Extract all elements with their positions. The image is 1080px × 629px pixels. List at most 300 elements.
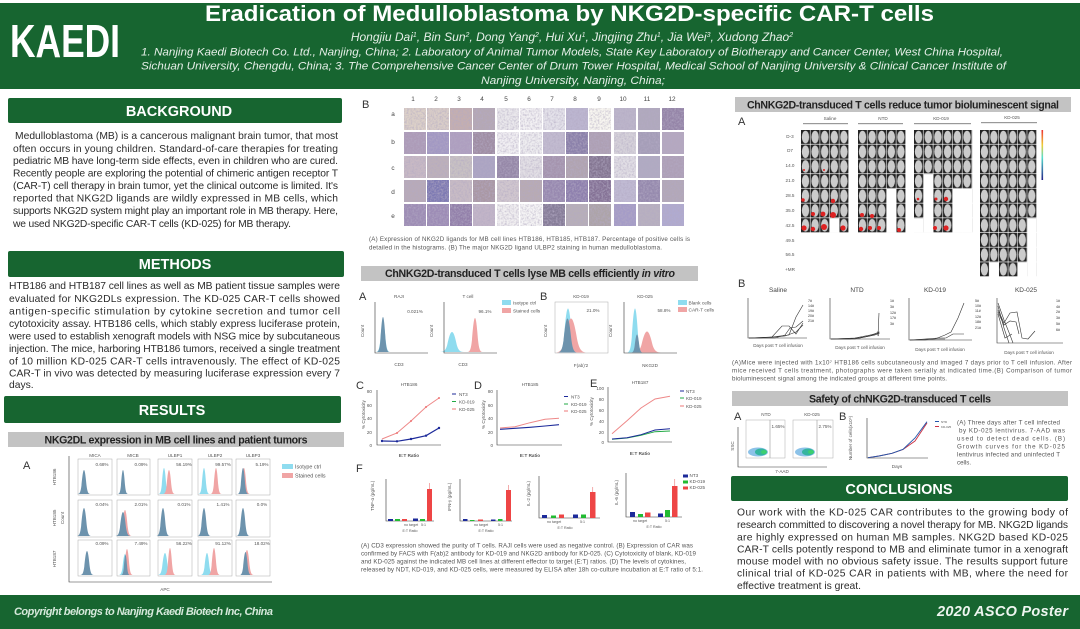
chart: RAJI: Count — [360, 324, 365, 337]
chart: KD-019: 10# — [975, 304, 981, 308]
heading: methods — [8, 251, 344, 277]
safety caption: cells. — [957, 460, 971, 466]
center figure caption — [361, 542, 703, 574]
chart: NKG2DL flow histograms: MICA — [89, 453, 102, 458]
row letters: d — [391, 189, 395, 196]
panel: D cytotoxicity HTB185 — [474, 380, 587, 458]
chart: RAJI: 0.021% — [407, 309, 423, 314]
background text: supports NKG2D system might play an important role in MB therapy. Here, — [13, 206, 338, 217]
chart: KD-019: 21# — [975, 326, 981, 330]
tissue caption: detailed in the histograms. (B) The major NKG2D ligand ULBP2 staining in human medulloblastoma. — [369, 244, 662, 252]
legend: NKG2DL — [282, 464, 326, 480]
chart: RAJI: RAJI — [394, 294, 404, 299]
chart: NKG2DL flow histograms: 0.09% — [95, 541, 109, 546]
chart: RAJI: CD3 — [394, 362, 404, 367]
bar chart: IFN: E:T Ratio — [479, 529, 493, 533]
header banner — [0, 1, 1080, 89]
bar chart: IL-6: no target — [547, 520, 561, 524]
chart: NTD: 3# — [890, 322, 894, 326]
panel: D cytotoxicity HTB185: 60 — [488, 403, 493, 408]
row letters — [391, 111, 395, 220]
methods text: cytotoxicity assay. HTB186 cells, which stably express luciferase protein, — [9, 319, 340, 330]
heading: conclusions — [731, 476, 1068, 501]
authors: Hongjiu Dai — [351, 30, 413, 44]
row labels: 56.5 — [786, 252, 795, 257]
panel: B CAR expression: B — [540, 291, 547, 303]
authors: , Dong Yang — [469, 30, 535, 44]
conclusions text: mouse model with no obvious safety issue. The results support future — [737, 556, 1068, 568]
panel: A mouse imaging: A — [738, 116, 746, 128]
center figure caption: confirmed by FACS with F(ab)2 antibody for KD-019 and NKG2D antibody for KD-025. (C) Cytotoxicity of blank, KD-019 — [361, 550, 697, 558]
background text: Medulloblastoma (MB) is a cancerous malignant brain tumor, that most — [15, 131, 338, 142]
chart: 7-AAD scatter: SSC — [730, 441, 735, 451]
panel: E cytotoxicity HTB187: 0 — [601, 440, 604, 445]
chart: NKG2DL flow histograms: 0.0% — [257, 502, 267, 507]
panel: D cytotoxicity HTB185: % Cytotoxicity — [481, 399, 486, 429]
column numbers: 9 — [597, 96, 601, 103]
panel: B growth curves: B — [839, 411, 846, 423]
panel: A mouse imaging — [738, 115, 1043, 277]
chart: 7-AAD scatter: NTD — [761, 412, 771, 417]
panel: B tumor signal curves — [738, 278, 1063, 355]
authors: 2 — [788, 32, 793, 39]
panel: E cytotoxicity HTB187: 80 — [599, 397, 604, 402]
chart: KD-019: 21.0% — [586, 308, 600, 313]
chart: KD-025: 58.8% — [657, 308, 671, 313]
chart: NKG2DL flow histograms: 18.02% — [254, 541, 270, 546]
authors: 1 — [657, 32, 661, 39]
row letters: b — [391, 139, 395, 146]
chart: NKG2DL flow histograms: ULBP2 — [208, 453, 223, 458]
panel: D cytotoxicity HTB185: 20 — [488, 430, 493, 435]
panel: D cytotoxicity HTB185: 80 — [488, 389, 493, 394]
chart: KD-019 — [909, 287, 981, 352]
heading: ChNKG2D lyse — [361, 266, 698, 281]
chart: Saline: 21# — [808, 319, 814, 323]
heading: results: RESULTS — [139, 403, 206, 419]
panel: C cytotoxicity HTB186: HTB186 — [401, 382, 418, 387]
chart: KD-025: NKG2D — [642, 363, 659, 368]
legend: CAR — [678, 300, 715, 314]
row labels: 14.0 — [786, 163, 795, 168]
bar chart: IFN: 5:1 — [498, 523, 503, 527]
chart: NTD — [830, 287, 896, 350]
chart: KD-025: Count — [608, 324, 613, 337]
chart: NKG2DL flow histograms: 91.12% — [215, 541, 231, 546]
panel: D cytotoxicity HTB185: HTB185 — [522, 382, 539, 387]
panel: E cytotoxicity HTB187: NT3 — [686, 389, 695, 394]
title: Eradication of Medulloblastoma by NKG2D-specific CAR-T cells — [205, 1, 934, 26]
panel: C cytotoxicity HTB186: 0 — [369, 443, 372, 448]
chart: NKG2DL flow histograms: HTB186 — [52, 468, 57, 485]
chart: KD-025: KD-025 — [637, 294, 653, 299]
chart: RAJI — [360, 294, 428, 367]
heading: safety: Safety of chNKG2D-transduced T cells — [809, 394, 991, 406]
panel: F cytokine bars — [356, 463, 706, 533]
column numbers: 3 — [457, 96, 461, 103]
background text: (CAR-T) cell therapy in brain tumor, yet the clinical outcome is limited. It's — [13, 181, 338, 192]
chart: NKG2DL flow histograms: HTB187 — [52, 550, 57, 567]
chart: T cell: CD3 — [458, 362, 468, 367]
safety caption: used to detect dead cells. (B) — [957, 436, 1065, 442]
bar chart: IL-2: no target — [633, 519, 647, 523]
bar chart: IFN: no target — [474, 523, 488, 527]
chart: growth: Number of cells(x10⁶) — [848, 415, 853, 460]
tissue grid — [404, 108, 684, 226]
panel: E cytotoxicity HTB187: 100 — [596, 386, 604, 391]
chart: NKG2DL flow histograms: ULBP1 — [168, 453, 183, 458]
safety caption: Growth curves for the KD-025 — [957, 444, 1066, 450]
bar chart: TNF — [370, 479, 434, 533]
bar chart: IL-6: 5:1 — [580, 520, 585, 524]
methods text: evaluated for NKG2DLs expression. The KD-025 CAR-T cells showed — [9, 294, 340, 305]
column numbers: 2 — [434, 96, 438, 103]
panel: B tumor signal curves: B — [738, 278, 745, 290]
chart: KD-019: 18# — [975, 320, 981, 324]
column numbers: 12 — [668, 96, 676, 103]
safety caption: (A) Three days after T cell infected — [957, 420, 1061, 426]
row labels: D-3 — [786, 134, 794, 139]
panel: C cytotoxicity HTB186: 40 — [367, 416, 372, 421]
tumor signal caption: mice received T cells treatment, photographs were taken serially at indicated time.(B) Comparison of tumor — [732, 368, 1072, 374]
background text: reported that NKG2D ligands are wildly expressed in MB cells, which — [13, 194, 338, 204]
chart: KD-025: 3# — [1056, 316, 1060, 320]
legend: CAR: CAR-T cells — [688, 308, 715, 314]
conclusions text: research committed to discovering a novel therapy for MB. NKG2D ligands — [737, 520, 1068, 531]
row labels: 28.5 — [786, 193, 795, 198]
chart: NKG2DL flow histograms: APC — [160, 587, 170, 592]
row labels — [785, 134, 796, 272]
chart: KD-025: 5# — [1056, 322, 1060, 326]
panel: C cytotoxicity HTB186: 20 — [367, 430, 372, 435]
bar chart: IL-2: E:T Ratio — [647, 525, 661, 529]
bar chart: IL-2: KD-025 — [690, 485, 706, 490]
panel: C cytotoxicity HTB186: % Cytotoxicity — [361, 399, 366, 429]
group: KD-025: KD-025 — [1004, 115, 1020, 120]
panel: E cytotoxicity HTB187: E:T Ratio — [630, 451, 650, 456]
authors: 2 — [534, 32, 539, 39]
row labels: 21.0 — [786, 178, 795, 183]
methods text: CAR-T in vivo was detected by measuring luciferase expression every 7 — [9, 368, 340, 380]
authors: 2 — [465, 32, 470, 39]
chart: Saline: 7# — [808, 299, 812, 303]
panel: C cytotoxicity HTB186: KD-025 — [459, 407, 475, 412]
conclusions text: clinical trial of KD-025 CAR in patients with MB, where the need for — [737, 568, 1069, 580]
chart: growth: KD-025 — [941, 425, 952, 429]
tumor signal caption — [732, 360, 1072, 382]
chart: KD-025: 1# — [1056, 299, 1060, 303]
column numbers: 5 — [504, 96, 508, 103]
bar chart: TNF: TNF-α (pg/mL) — [370, 480, 375, 511]
center figure caption: and KD-025 against the indicated MB cell lines at different effector to target (E:T) ratios. (D) The levels of cytokines, — [361, 558, 686, 566]
chart: T cell: T cell — [463, 294, 473, 299]
bar chart: IL-2: 5:1 — [665, 519, 670, 523]
center figure caption: (A) CD3 expression showed the purity of T cells. RAJI cells were used as negative control. (B) Expression of CAR was — [361, 542, 693, 550]
chart: KD-025: Days post T cell infusion — [1004, 350, 1054, 355]
chart: KD-019: Days post T cell infusion — [915, 347, 965, 352]
chart: Saline: Saline — [769, 287, 787, 294]
panel: F cytokine bars: F — [356, 463, 363, 475]
authors: , Jia Wei — [661, 30, 707, 44]
panel: C cytotoxicity HTB186 — [356, 380, 475, 458]
chart: T cell — [429, 294, 497, 367]
chart: KD-019: F(ab)'2 — [574, 363, 589, 368]
authors: 1 — [582, 32, 586, 39]
methods text: HTB186 and HTB187 cell lines as well as MB patient tissue samples were — [9, 281, 340, 292]
chart: KD-019: 5# — [975, 299, 979, 303]
chart: KD-025 — [608, 294, 677, 368]
chart: KD-019: 11# — [975, 309, 981, 313]
background text: Recently people are exploring the potential of chimeric antigen receptor T — [13, 168, 339, 180]
panel: D cytotoxicity HTB185: E:T Ratio — [520, 453, 540, 458]
chart: NTD: 12# — [890, 311, 896, 315]
row labels: 49.5 — [786, 238, 795, 243]
panel: D cytotoxicity HTB185: KD-019 — [571, 402, 587, 407]
row labels: +MR — [785, 267, 796, 272]
chart: NKG2DL flow histograms: 0.68% — [95, 462, 109, 467]
row labels: 42.5 — [786, 223, 795, 228]
chart: NKG2DL flow histograms: 56.19% — [176, 462, 192, 467]
group: KD-025 — [980, 115, 1037, 277]
authors: , Bin Sun — [417, 30, 466, 44]
panel: A CD3 histograms — [359, 291, 541, 367]
methods text: antigen-specific stimulation by cytokine secretion and tumor cell — [9, 306, 340, 318]
affiliations: Nanjing University, Nanjing, China; — [481, 75, 665, 87]
safety caption: lentivirus infected and uninfected T — [957, 452, 1060, 458]
methods text: of 10 million KD-025 CAR-T cells intravenously. The effect of KD-025 — [9, 356, 340, 368]
tumor signal caption: (A)Mice were injected with 1x10⁷ HTB186 cells subcutaneously and imaged 7 days prior to T cell infusion. After — [732, 360, 1072, 366]
bar chart: IL-2 — [614, 473, 706, 529]
authors: , Xudong Zhao — [711, 30, 790, 44]
authors: , Jingjing Zhu — [586, 30, 657, 44]
panel: C cytotoxicity HTB186: E:T Ratio — [399, 453, 419, 458]
group: NTD — [858, 116, 906, 233]
panel label: A NKG2DL: A — [23, 460, 31, 472]
chart: KD-019: Count — [543, 324, 548, 337]
panel: A safety flow: A — [734, 411, 742, 423]
chart: NTD: 17# — [890, 316, 896, 320]
chart: growth: Days — [892, 464, 903, 469]
chart: NKG2DL flow histograms: HTB185 — [52, 509, 57, 526]
panel: C cytotoxicity HTB186: C — [356, 380, 364, 392]
heading: NKG2DL expression — [8, 432, 344, 447]
panel: C cytotoxicity HTB186: NT3 — [459, 392, 468, 397]
panel: C cytotoxicity HTB186: 80 — [367, 389, 372, 394]
heading: background: BACKGROUND — [126, 104, 232, 120]
column numbers: 4 — [480, 96, 484, 103]
chart: NKG2DL flow histograms: 0.04% — [95, 502, 109, 507]
panel: B CAR expression — [540, 291, 715, 368]
group: KD-019 — [914, 116, 972, 233]
column numbers: 8 — [573, 96, 577, 103]
chart: growth — [848, 415, 952, 469]
legend: CD3: Isotype ctrl — [513, 300, 536, 306]
tissue caption: (A) Expression of NKG2D ligands for MB cell lines HTB186, HTB185, HTB187. Percentage of positive cells is — [369, 236, 690, 243]
bar chart: IL-2: KD-019 — [690, 479, 706, 484]
heading: conclusions: CONCLUSIONS — [845, 482, 953, 498]
background text: we used NKG2D-specific CAR-T cells (KD-025) for MB therapy. — [12, 219, 291, 230]
panel: E cytotoxicity HTB187: 20 — [599, 430, 604, 435]
footer banner — [0, 595, 1080, 629]
panel: A safety flow — [730, 411, 833, 474]
heading: safety — [732, 391, 1068, 406]
methods text: were used to establish xenograft models with NSG mice by subcutaneous — [8, 332, 340, 342]
panel: D cytotoxicity HTB185: NT3 — [571, 394, 580, 400]
panel: E cytotoxicity HTB187 — [589, 378, 702, 456]
tissue caption — [369, 236, 690, 252]
chart: KD-025: 6# — [1056, 328, 1060, 332]
chart: NTD: Days post T cell infusion — [835, 345, 885, 350]
panel: D cytotoxicity HTB185: KD-025 — [571, 409, 587, 414]
chart: Saline: 19# — [808, 309, 814, 313]
conclusions text — [737, 508, 1069, 592]
conclusions text: effective treatment is great. — [737, 581, 861, 592]
panel: B growth curves — [839, 411, 1066, 469]
safety caption: by KD-025 lentivirus. 7-AAD was — [959, 428, 1065, 434]
chart: NKG2DL flow histograms: 56.22% — [176, 541, 192, 546]
panel: B tissue staining — [362, 96, 690, 252]
chart: KD-025: KD-025 — [1015, 287, 1037, 294]
column numbers: 6 — [527, 96, 531, 103]
methods text: days. — [9, 380, 34, 391]
chart: KD-019: KD-019 — [573, 294, 589, 299]
heading: methods: METHODS — [139, 257, 212, 273]
panel: conclusions — [731, 476, 1069, 592]
legend: CD3: Stained cells — [513, 308, 541, 314]
center figure caption: released by NDT, KD-019, and KD-025 cells, were measured by ELISA after 18h co-culture incubation at E:T ratio of 5:1. — [361, 566, 703, 574]
copyright: Copyright belongs to Nanjing Kaedi Biotech Inc, China — [14, 606, 273, 618]
panel: A CD3 histograms: A — [359, 291, 367, 303]
conclusions text: Our work with the KD-025 CAR contributes to the growing body of — [737, 508, 1068, 518]
chart: 7-AAD scatter: KD-025 — [804, 412, 820, 417]
chart: NTD: NTD — [850, 287, 864, 294]
authors: , Hui Xu — [539, 30, 582, 44]
colour scale — [1042, 130, 1043, 180]
chart: KD-025: 2# — [1056, 310, 1060, 314]
chart: NKG2DL flow histograms: 1.41% — [216, 502, 230, 507]
chart: growth: NTD — [941, 420, 948, 424]
affiliations: Sichuan University, Chengdu, China; 3. The Comprehensive Cancer Center of Drum Tower Hospital, Medical School of Nanjing University & Clinical Cancer Institute of — [141, 60, 1007, 72]
panel: E cytotoxicity HTB187: % Cytotoxicity — [589, 396, 594, 426]
chart: KD-019: 12# — [975, 315, 981, 319]
bar chart: IFN: IFN-γ (pg/mL) — [447, 482, 452, 511]
panel: C cytotoxicity HTB186: KD-019 — [459, 400, 475, 404]
background text: often occurs in young children. Standard-of-care therapies for treating — [13, 144, 338, 155]
heading: results — [4, 396, 341, 423]
panel: E cytotoxicity HTB187: KD-025 — [686, 404, 702, 409]
bar chart: TNF: E:T Ratio — [403, 529, 417, 533]
methods text — [8, 281, 340, 391]
affiliations: 1. Nanjing Kaedi Biotech Co. Ltd., Nanjing, China; 2. Laboratory of Animal Tumor Models, State Key Laboratory of Biotherapy and Cancer Center, West China Hospital, — [141, 46, 1003, 58]
legend: NKG2DL: Stained cells — [295, 474, 326, 480]
logo: KAEDI: KAEDI — [10, 15, 120, 67]
panel: D cytotoxicity HTB185: 40 — [488, 416, 493, 421]
panel: E cytotoxicity HTB187: HTB187 — [632, 380, 649, 385]
chart: 7-AAD scatter: 7-AAD — [775, 469, 789, 474]
legend: CD3 — [502, 300, 541, 314]
chart: KD-019: KD-019 — [924, 287, 946, 294]
methods text: injection. The mice, harboring HTB186 tumors, received a single treatment — [9, 344, 340, 355]
poster tag: 2020 ASCO Poster — [936, 604, 1069, 620]
heading: background — [8, 98, 342, 123]
group: Saline: Saline — [824, 116, 837, 121]
chart: T cell: Count — [429, 324, 434, 337]
chart: KD-019 — [543, 294, 608, 368]
chart: NKG2DL flow histograms: 2.01% — [134, 502, 148, 507]
authors: 3 — [707, 32, 711, 39]
chart: 7-AAD scatter: 2.75% — [818, 424, 832, 429]
heading: NKG2DL expression: NKG2DL expression in MB cell lines and patient tumors — [44, 434, 308, 446]
legend: NKG2DL: Isotype ctrl — [295, 464, 321, 470]
group: NTD: NTD — [878, 116, 888, 121]
group: Saline — [801, 116, 849, 233]
bar chart: IL-6: E:T Ratio — [558, 526, 572, 530]
column numbers: 11 — [644, 96, 651, 103]
panel: C cytotoxicity HTB186: 60 — [367, 403, 372, 408]
group: KD-019: KD-019 — [933, 116, 949, 121]
chart: 7-AAD scatter — [730, 412, 833, 474]
panel: E cytotoxicity HTB187: 60 — [599, 408, 604, 413]
conclusions text: CAR-T cells potently respond to MB and eliminate tumor in a xenograft — [737, 544, 1068, 556]
row labels: 35.0 — [786, 208, 795, 213]
affiliations — [141, 46, 1007, 87]
bar chart: IL-6: IL-2 (pg/mL) — [526, 481, 531, 506]
chart: NKG2DL flow histograms: ULBP3 — [246, 453, 261, 458]
chart: T cell: 96.1% — [478, 309, 492, 314]
row letters: e — [391, 213, 395, 220]
chart: NTD: 3# — [890, 305, 894, 309]
bar chart: IFN — [447, 479, 512, 533]
bar chart: IL-6 — [526, 476, 600, 530]
column numbers — [411, 96, 676, 103]
panel: background — [8, 98, 342, 230]
chart: NKG2DL flow histograms: Count — [60, 511, 65, 524]
column numbers: 10 — [619, 96, 627, 103]
panel: E cytotoxicity HTB187: KD-019 — [686, 396, 702, 401]
chart: NKG2DL flow histograms — [52, 453, 272, 592]
chart: Saline — [748, 287, 814, 348]
column numbers: 7 — [550, 96, 554, 103]
chart: NKG2DL flow histograms: 0.09% — [134, 462, 148, 467]
panel: D cytotoxicity HTB185: 0 — [490, 443, 493, 448]
bar chart: IL-2: IL-6 (pg/mL) — [614, 480, 619, 505]
heading: bioluminescent: ChNKG2D-transduced T cells reduce tumor bioluminescent signal — [747, 100, 1059, 112]
panel: methods — [8, 251, 344, 391]
safety caption — [957, 420, 1066, 466]
chart: Saline: 20# — [808, 314, 814, 318]
bar chart: IL-2: NT3 — [690, 473, 699, 478]
legend: CAR: Blank cells — [688, 300, 712, 306]
chart: Saline: 14# — [808, 304, 814, 308]
chart: KD-025 — [997, 287, 1063, 355]
authors: 1 — [413, 32, 417, 39]
column numbers: 1 — [411, 96, 415, 103]
background text: pediatric MB have long-term side effects, even in children who are cured. — [13, 156, 338, 167]
bar chart: TNF: 5:1 — [421, 523, 426, 527]
chart: NKG2DL flow histograms: MICB — [127, 453, 139, 458]
row letters: a — [391, 111, 395, 118]
chart: NKG2DL flow histograms: 0.01% — [177, 502, 191, 507]
bar chart: TNF: no target — [404, 523, 418, 527]
chart: NKG2DL flow histograms: 7.49% — [134, 541, 148, 546]
tumor signal caption: bioluminescent signal among the indicated groups at different time points. — [732, 376, 947, 382]
background text — [12, 131, 339, 230]
panel: E cytotoxicity HTB187: E — [590, 378, 597, 390]
chart: 7-AAD scatter: 1.65% — [771, 424, 785, 429]
chart: NTD: 1# — [890, 299, 894, 303]
chart: Saline: Days post T cell infusion — [753, 343, 803, 348]
heading: ChNKG2D lyse: ChNKG2D-transduced T cells lyse MB cells efficiently in vitro — [385, 268, 676, 280]
